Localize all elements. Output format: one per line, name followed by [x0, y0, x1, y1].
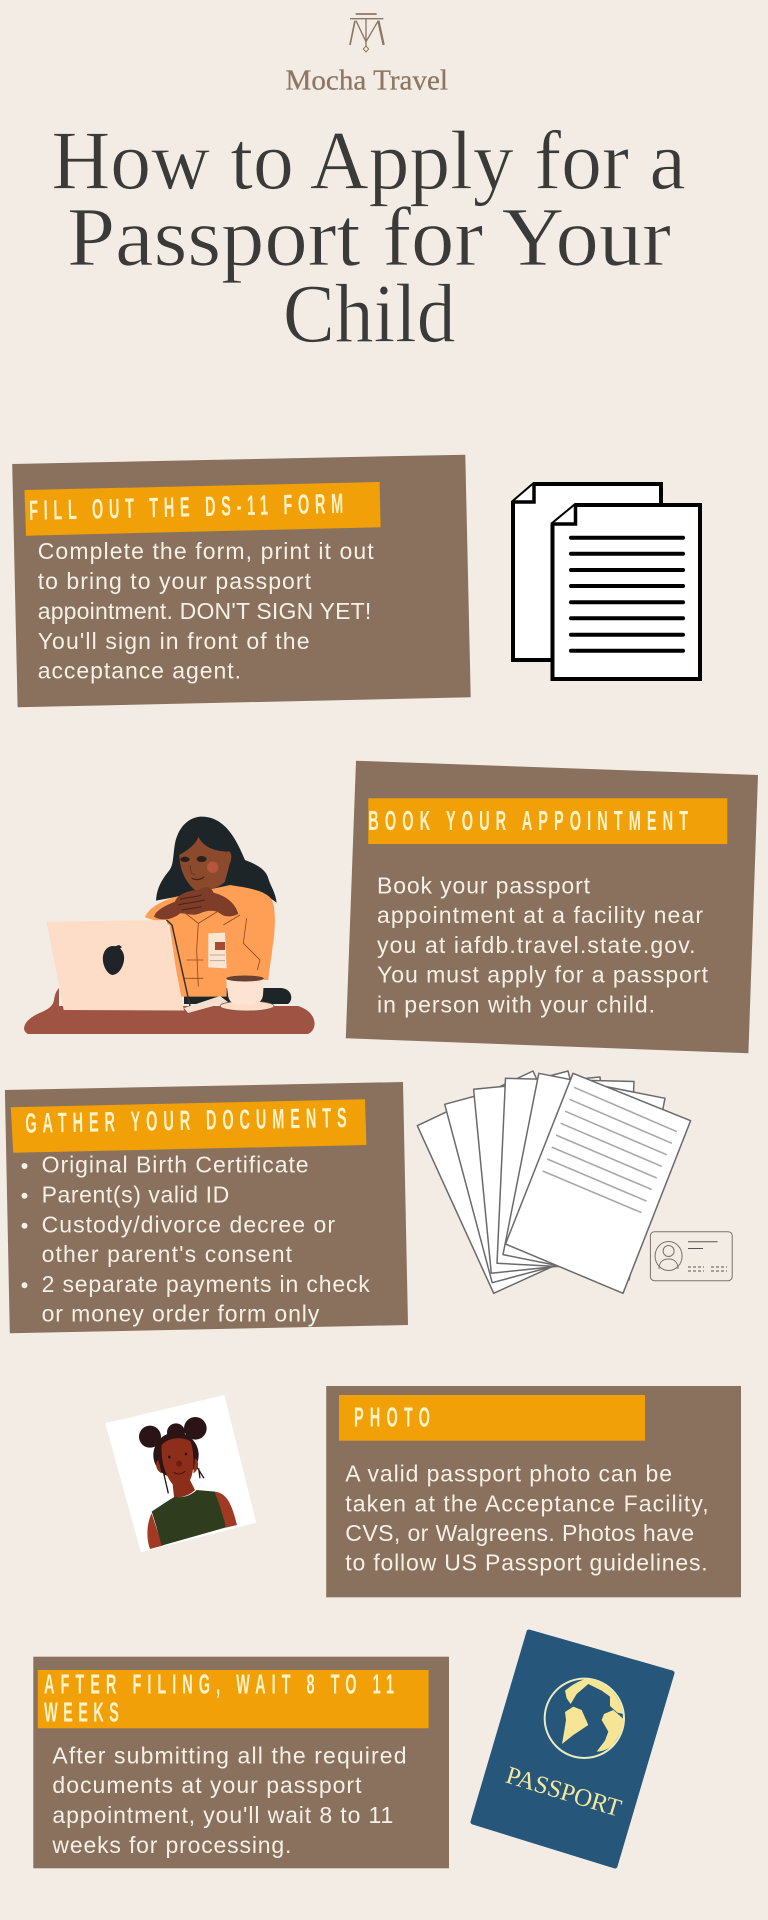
- braids: [163, 1467, 204, 1493]
- strawberry logo: [103, 946, 124, 975]
- heading: WEEKS: [44, 1697, 119, 1728]
- illustration: passport photo: [105, 1395, 256, 1552]
- body text: appointment, you'll wait 8 to 11: [52, 1802, 393, 1828]
- heading: BOOK YOUR APPOINTMENT: [368, 805, 688, 836]
- list text: 2 separate payments in check: [42, 1271, 370, 1297]
- body text: [377, 872, 709, 1018]
- body text: acceptance agent.: [38, 658, 241, 684]
- list text: [42, 1152, 370, 1327]
- heading: [44, 1668, 394, 1728]
- body text: After submitting all the required: [52, 1742, 406, 1768]
- list text: Original Birth Certificate: [42, 1152, 309, 1178]
- panel: book your appointment: [346, 761, 758, 1053]
- title: Child: [283, 268, 456, 361]
- arms: [147, 1492, 237, 1549]
- body text: taken at the Acceptance Facility,: [345, 1490, 709, 1516]
- illustration: woman at laptop: [24, 817, 315, 1034]
- passport label: PASSPORT: [503, 1762, 624, 1823]
- icon: ID card: [650, 1232, 732, 1281]
- body text: [38, 538, 374, 684]
- text lines on top sheet: [543, 1087, 677, 1213]
- bullets: [22, 1163, 28, 1288]
- icon: monogram: [350, 14, 384, 52]
- trousers: [184, 988, 291, 1004]
- neck and face: [162, 1438, 195, 1497]
- globe: [545, 1679, 624, 1758]
- cup: [226, 979, 264, 1005]
- body text: to follow US Passport guidelines.: [345, 1550, 708, 1576]
- logo: Mocha Travel: [286, 14, 448, 96]
- cheek: [207, 862, 218, 873]
- hands: [154, 887, 238, 919]
- body text: in person with your child.: [377, 992, 655, 1018]
- body text: documents at your passport: [52, 1772, 362, 1798]
- upper body: [145, 817, 277, 997]
- list text: or money order form only: [42, 1301, 320, 1327]
- keyboard: [184, 996, 228, 1013]
- heading: AFTER FILING, WAIT 8 TO 11: [44, 1668, 394, 1700]
- body text: You'll sign in front of the: [38, 628, 309, 654]
- icon: passport booklet: [473, 1632, 672, 1866]
- body text: you at iafdb.travel.state.gov.: [377, 932, 696, 958]
- illustration: fanned paper sheets: [417, 1071, 691, 1293]
- face: [179, 837, 230, 890]
- shirt lines: [183, 910, 260, 987]
- panel: fill out the DS-11 form: [12, 455, 471, 707]
- title: [51, 114, 686, 361]
- body text: You must apply for a passport: [377, 962, 709, 988]
- laptop: [46, 920, 184, 1010]
- body text: [345, 1461, 709, 1576]
- list text: other parent's consent: [42, 1241, 293, 1267]
- body text: appointment. DON'T SIGN YET!: [38, 598, 371, 624]
- body text: Complete the form, print it out: [38, 538, 374, 564]
- eyes: [180, 857, 190, 862]
- title: How to Apply for a: [51, 114, 686, 207]
- list text: Parent(s) valid ID: [42, 1182, 229, 1208]
- top: [152, 1490, 226, 1546]
- list text: Custody/divorce decree or: [42, 1211, 335, 1237]
- heading: FILL OUT THE DS-11 FORM: [29, 488, 344, 526]
- title: Passport for Your: [67, 191, 671, 284]
- hair: [156, 817, 277, 903]
- text: brand name: Mocha Travel: [286, 64, 448, 96]
- ID badge: [208, 933, 227, 968]
- body text: CVS, or Walgreens. Photos have: [345, 1520, 694, 1546]
- panel: gather your documents: [5, 1082, 408, 1333]
- saucer: [220, 1001, 274, 1011]
- panel: after filing: [33, 1657, 449, 1868]
- heading: GATHER YOUR DOCUMENTS: [25, 1102, 347, 1139]
- body text: weeks for processing.: [51, 1832, 291, 1858]
- shirt: [145, 885, 275, 997]
- panel: photo: [326, 1386, 741, 1597]
- icon: stacked documents: [513, 484, 700, 679]
- body text: Book your passport: [377, 872, 591, 898]
- body text: appointment at a facility near: [377, 902, 703, 928]
- body text: A valid passport photo can be: [345, 1461, 672, 1487]
- heading: PHOTO: [354, 1402, 430, 1433]
- body text: to bring to your passport: [38, 568, 312, 594]
- body text: [51, 1742, 406, 1858]
- facial features: [168, 1456, 171, 1458]
- hair buns: [139, 1417, 207, 1478]
